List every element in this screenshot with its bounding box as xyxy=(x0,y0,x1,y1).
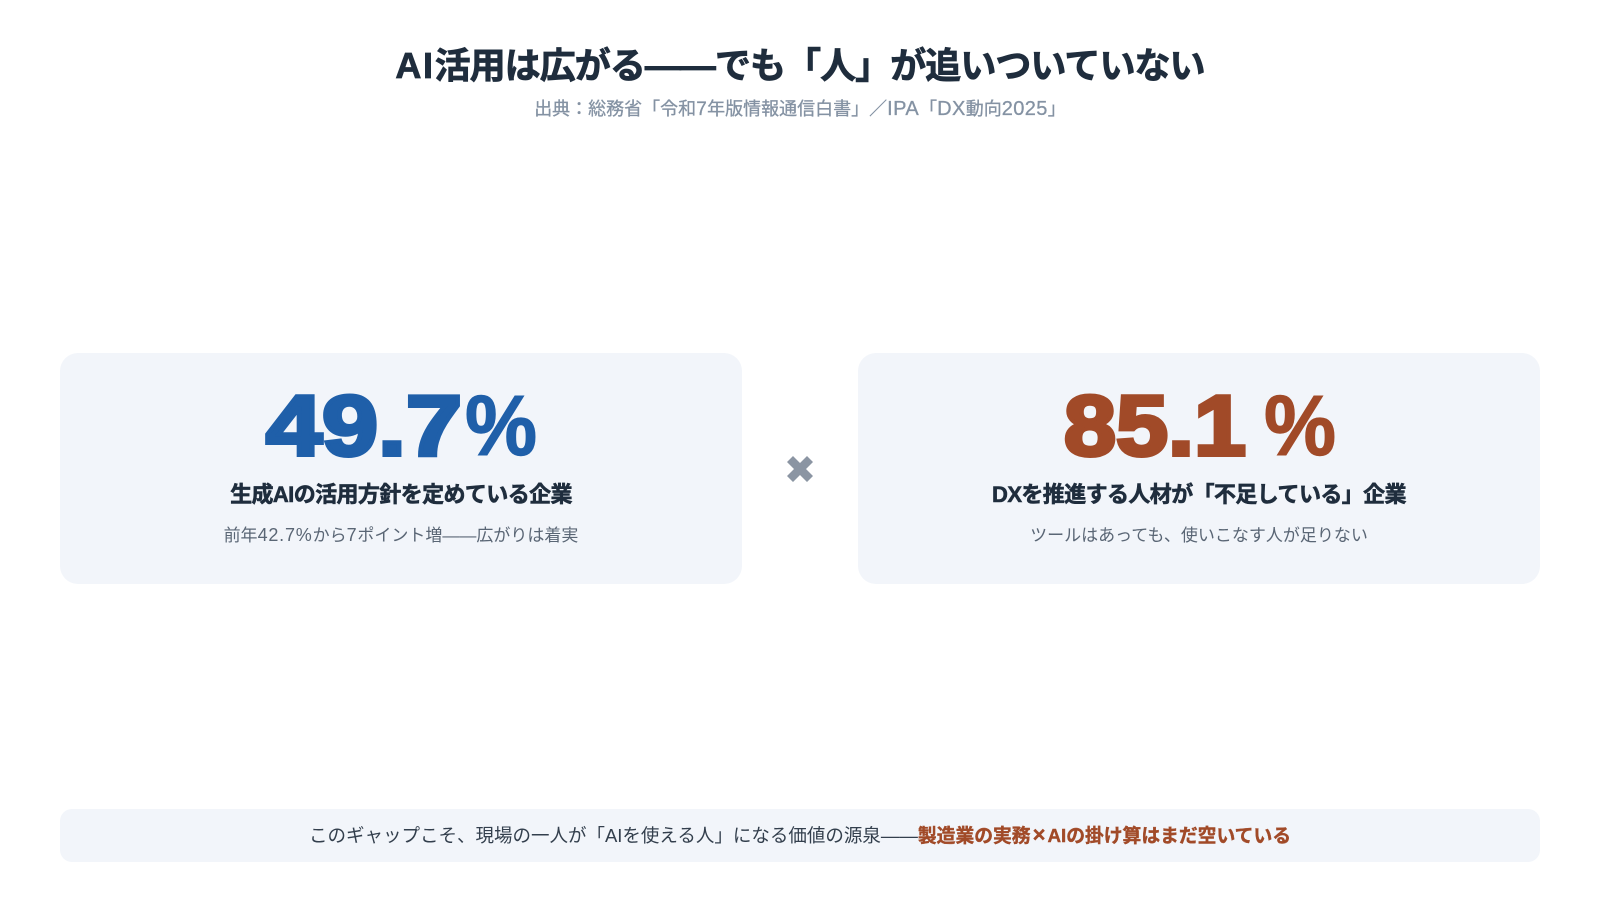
big number: 85.1% xyxy=(1064,379,1336,474)
big number: 49.7%: 49.7 xyxy=(266,379,462,474)
label: AI adoption: 生成AIの活用方針を定めている企業 xyxy=(230,482,572,507)
panel: AI adoption xyxy=(60,353,742,584)
big number: 85.1%: % xyxy=(1264,379,1336,474)
note: DX talent shortage: ツールはあっても、使いこなす人が足りない xyxy=(1030,526,1368,545)
title: AI活用は広がる——でも「人」が追いついていない xyxy=(395,45,1205,86)
panel: DX talent shortage xyxy=(858,353,1540,584)
takeaway text: このギャップこそ、現場の一人が「AIを使える人」になる価値の源泉——製造業の実務×AIの掛け算はまだ空いている xyxy=(309,822,1291,847)
takeaway banner xyxy=(60,809,1540,862)
big number: 49.7%: % xyxy=(465,379,537,474)
big number: 85.1%: 85.1 xyxy=(1064,379,1246,474)
icon: multiply sign xyxy=(787,456,813,482)
label: DX talent shortage: DXを推進する人材が「不足している」企業 xyxy=(992,482,1406,507)
note: AI adoption: 前年42.7%から7ポイント増——広がりは着実 xyxy=(224,525,578,545)
source line: 出典：総務省「令和7年版情報通信白書」／IPA「DX動向2025」 xyxy=(534,98,1066,120)
